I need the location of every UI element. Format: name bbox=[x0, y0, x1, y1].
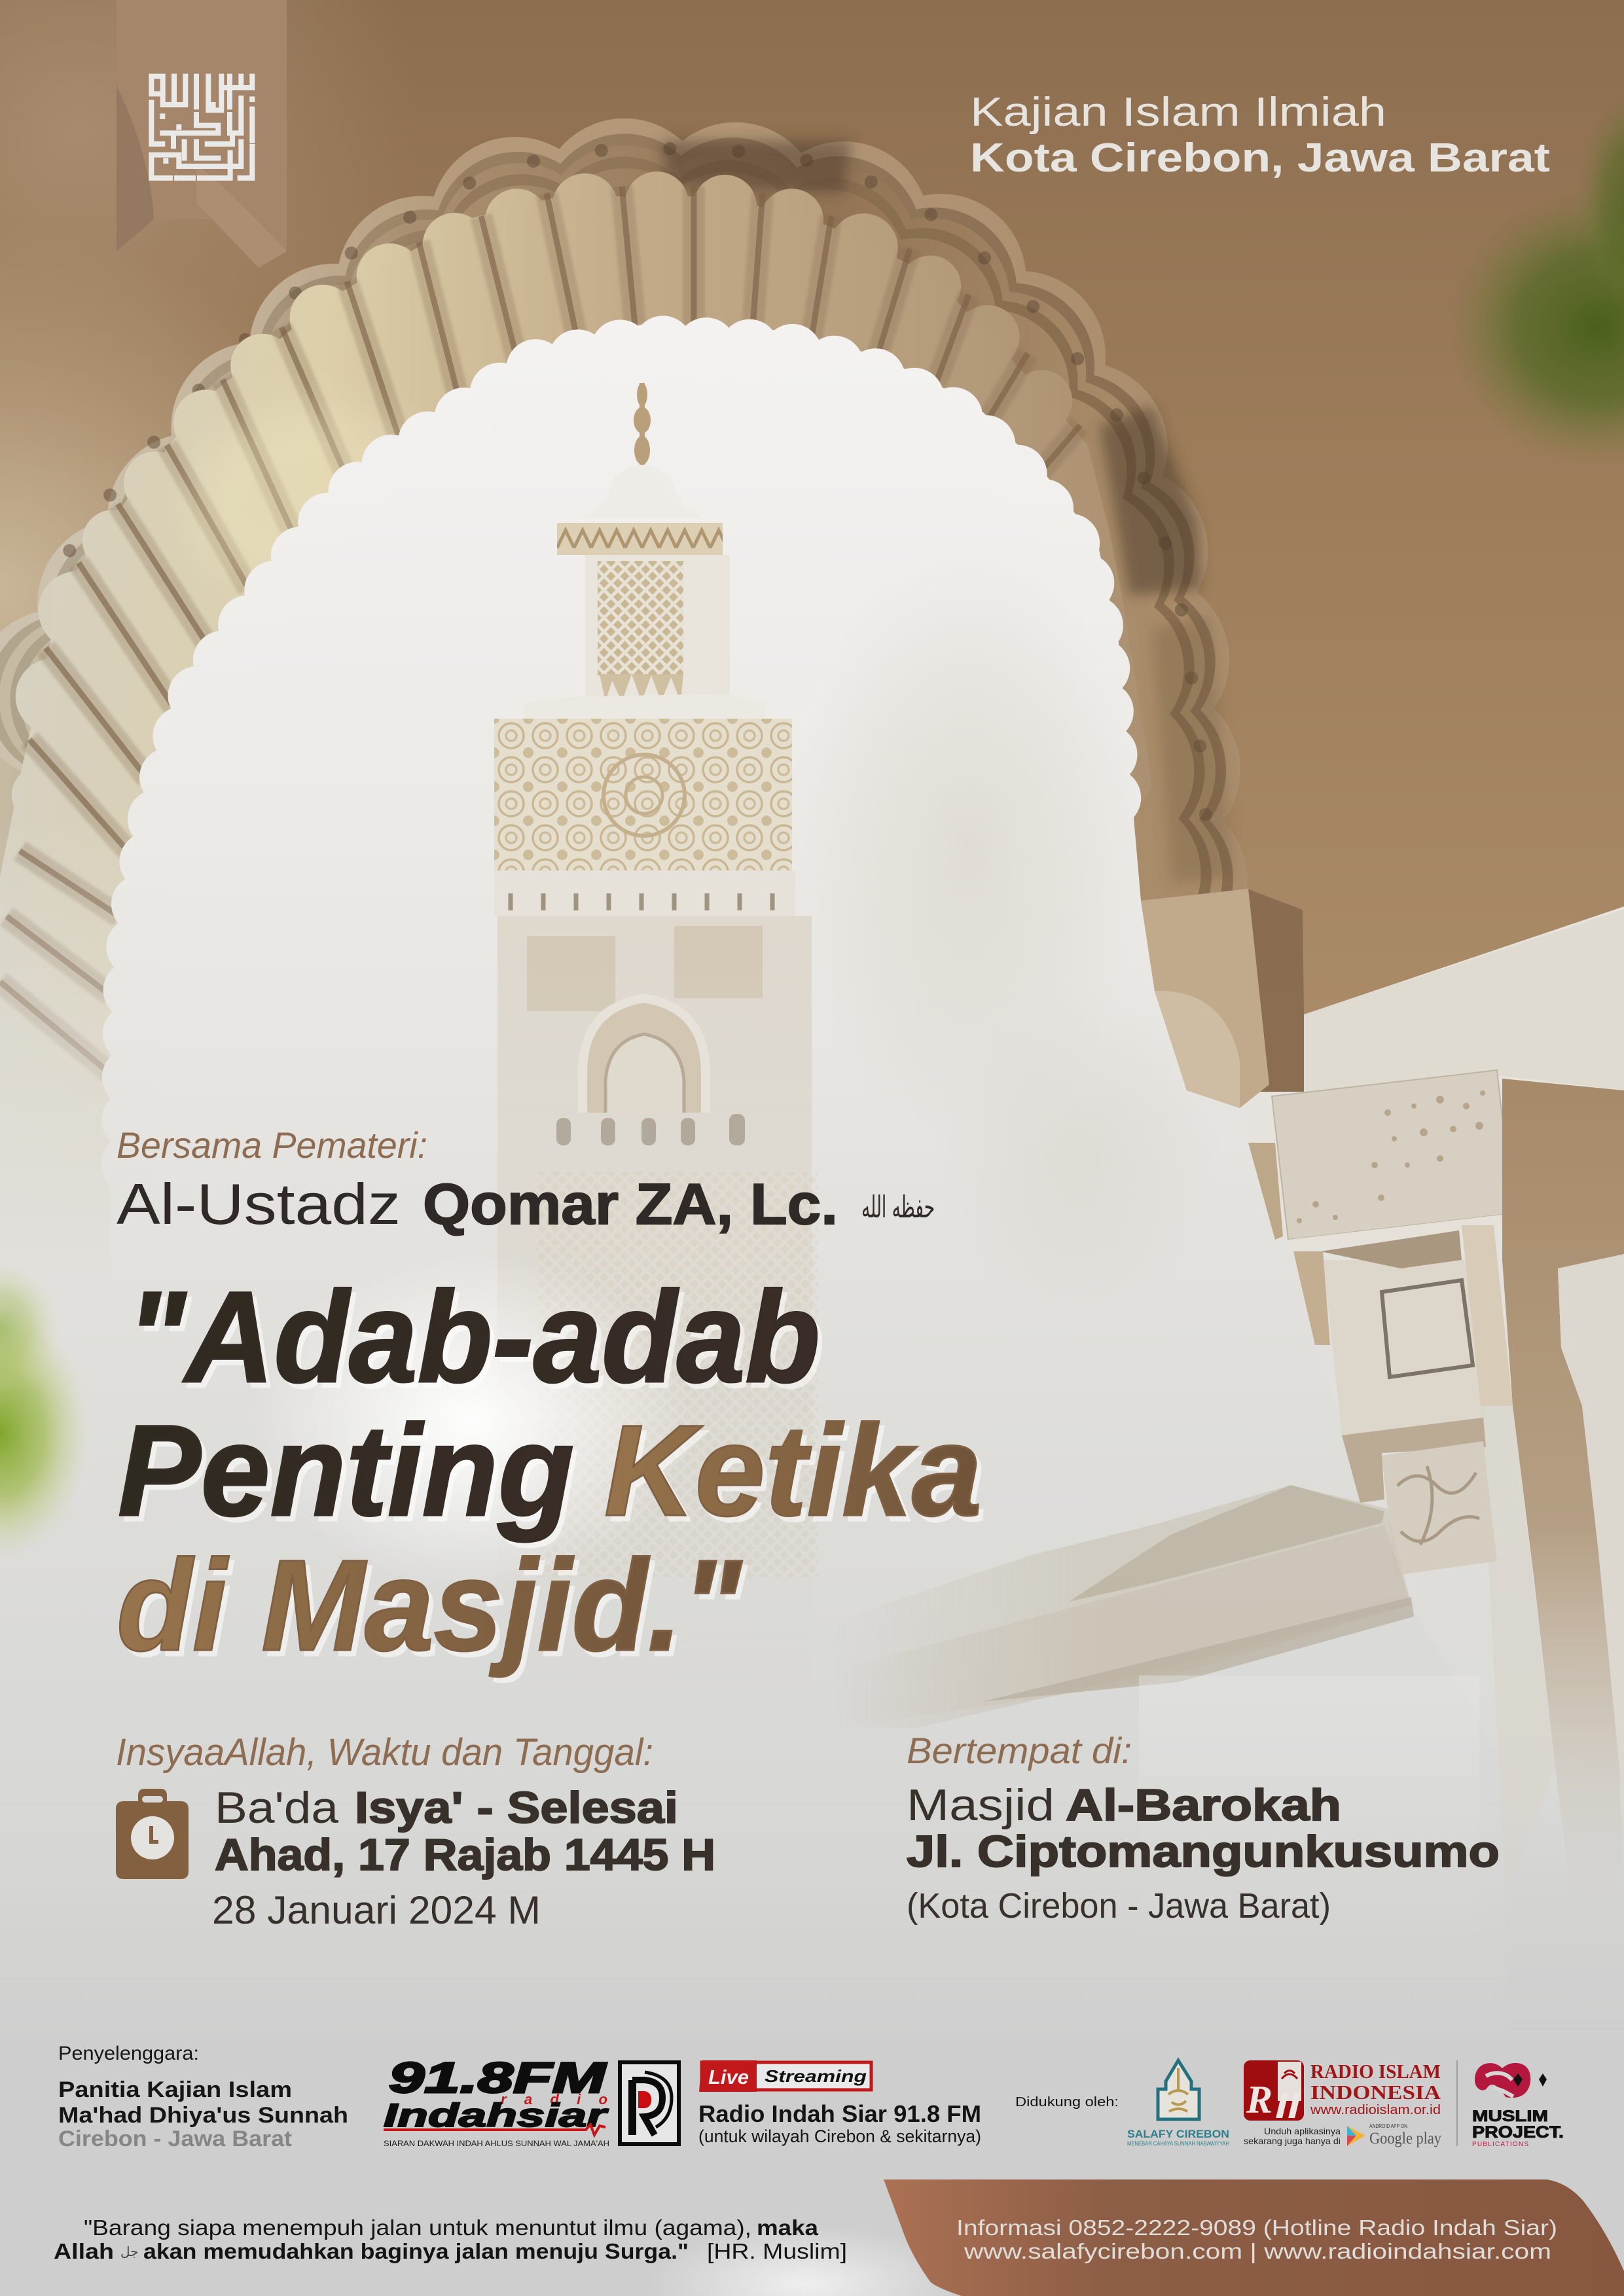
organizer block bbox=[58, 2043, 348, 2151]
heading: event location: Kota Cirebon, Jawa Barat bbox=[970, 135, 1550, 181]
hadith quote: maka bbox=[757, 2215, 819, 2240]
organizer block: Ma'had Dhiya'us Sunnah bbox=[58, 2103, 348, 2128]
arch opening: bright sky bbox=[0, 325, 1506, 2296]
live streaming text: (untuk wilayah Cirebon & sekitarnya) bbox=[698, 2126, 981, 2146]
logo: Radio Islam Indonesia: INDONESIA bbox=[1310, 2081, 1441, 2104]
main title: Ketika bbox=[604, 1398, 982, 1543]
minaret finial bbox=[634, 383, 651, 465]
logo: Muslim Project: MUSLIM bbox=[1472, 2108, 1548, 2125]
logo: Radio Islam Indonesia: www.radioislam.or.id bbox=[1310, 2103, 1441, 2117]
hadith quote: جل bbox=[120, 2244, 139, 2259]
logo: Salafy Cirebon bbox=[1127, 2060, 1229, 2147]
logo: Radio Islam Indonesia: Google play bbox=[1369, 2130, 1441, 2147]
venue details: Jl. Ciptomangunkusumo bbox=[907, 1827, 1500, 1876]
background: brown wall bbox=[0, 0, 1624, 1092]
logo: 91.8FM radio Indah Siar: radio bbox=[501, 2091, 607, 2108]
logo: 91.8FM radio Indah Siar: 91.8FM bbox=[389, 2053, 607, 2102]
hadith quote: "Barang siapa menempuh jalan untuk menuntut ilmu (agama), bbox=[84, 2215, 751, 2240]
heading: event location: Kajian Islam Ilmiah bbox=[970, 90, 1386, 135]
white glow behind title bbox=[249, 1250, 694, 1590]
venue details: Al-Barokah bbox=[1066, 1780, 1341, 1830]
right building: wall and stone blocks bbox=[1141, 889, 1624, 1898]
main title: Penting bbox=[118, 1398, 574, 1543]
fade into footer bbox=[0, 1734, 1624, 2296]
logo: Salafy Cirebon: SALAFY CIREBON bbox=[1127, 2128, 1229, 2140]
organizer block: Penyelenggara: bbox=[58, 2043, 199, 2064]
logo: Radio Islam Indonesia bbox=[1244, 2060, 1441, 2147]
minaret tower bbox=[494, 383, 818, 1734]
main title bbox=[117, 1265, 982, 1677]
speaker name bbox=[117, 1172, 935, 1236]
venue details: Masjid bbox=[907, 1780, 1055, 1830]
icon: square kufic bismillah logo bbox=[151, 77, 252, 178]
venue label: Bertempat di: bbox=[907, 1730, 1132, 1771]
logo: Radio Islam Indonesia: ANDROID APP ON bbox=[1369, 2123, 1407, 2129]
logo: 91.8FM radio Indah Siar: SIARAN DAKWAH INDAH AHLUS SUNNAH WAL JAMA'AH bbox=[384, 2139, 609, 2148]
hadith quote: [HR. Muslim] bbox=[707, 2239, 847, 2263]
logo: 91.8FM radio Indah Siar bbox=[384, 2053, 609, 2148]
blurred leaf: left bbox=[0, 1263, 88, 1558]
time and date: 28 Januari 2024 M bbox=[212, 1888, 541, 1932]
speaker label: Bersama Pemateri: bbox=[117, 1124, 427, 1166]
panel: contact information: Informasi 0852-2222-9089 (Hotline Radio Indah Siar) bbox=[956, 2215, 1557, 2240]
time and date bbox=[212, 1783, 715, 1932]
live streaming text bbox=[698, 2100, 981, 2146]
hadith quote: Allah bbox=[54, 2239, 114, 2263]
arch: ornamented stone band bbox=[0, 141, 1234, 1374]
venue details: (Kota Cirebon - Jawa Barat) bbox=[907, 1886, 1331, 1926]
blurred leaf: top right bbox=[1450, 92, 1624, 465]
main title: "Adab-adab bbox=[127, 1265, 820, 1409]
logo: Radio Islam Indonesia: RADIO ISLAM bbox=[1310, 2060, 1441, 2083]
organizer block: Cirebon - Jawa Barat bbox=[58, 2126, 292, 2151]
hadith quote: akan memudahkan baginya jalan menuju Surga." bbox=[143, 2239, 689, 2263]
arch: voussoir stones bbox=[0, 171, 1152, 1374]
logo: Muslim Project: PROJECT. bbox=[1472, 2123, 1564, 2142]
speaker name: Al-Ustadz bbox=[117, 1172, 401, 1236]
logo: Muslim Project bbox=[1457, 2060, 1564, 2148]
heading: event location bbox=[970, 90, 1550, 181]
time and date: Isya' - Selesai bbox=[355, 1783, 678, 1833]
main title: di Masjid." bbox=[117, 1533, 742, 1677]
live streaming badge bbox=[699, 2060, 871, 2092]
time and date: Ba'da bbox=[215, 1783, 338, 1833]
venue details bbox=[907, 1780, 1500, 1926]
logo: Radio Islam Indonesia: Unduh aplikasinya bbox=[1264, 2126, 1341, 2136]
live streaming badge: Streaming bbox=[765, 2066, 867, 2086]
logo: Radio Islam Indonesia: R bbox=[1246, 2078, 1272, 2121]
ribbon tag bbox=[117, 0, 287, 268]
left fade of the arch bbox=[0, 818, 216, 1374]
speaker name: Qomar ZA, Lc. bbox=[423, 1172, 838, 1236]
hadith quote bbox=[54, 2215, 847, 2263]
logo: R emblem bbox=[620, 2062, 679, 2144]
time and date: Ahad, 17 Rajab 1445 H bbox=[215, 1830, 715, 1880]
logo: Muslim Project: PUBLICATIONS bbox=[1472, 2141, 1528, 2148]
supporters label: Didukung oleh: bbox=[1015, 2095, 1119, 2109]
logo: Radio Islam Indonesia: sekarang juga hanya di bbox=[1244, 2136, 1341, 2146]
logo: Radio Islam Indonesia: II bbox=[1275, 2085, 1301, 2126]
right building: sloping roof bbox=[831, 1485, 1414, 1728]
live streaming badge: Live bbox=[708, 2066, 749, 2089]
white building wall under the roof bbox=[1139, 1676, 1479, 1977]
logo: 91.8FM radio Indah Siar: Indahsiar bbox=[384, 2097, 609, 2134]
live streaming text: Radio Indah Siar 91.8 FM bbox=[698, 2100, 981, 2127]
time label: InsyaaAllah, Waktu dan Tanggal: bbox=[116, 1731, 653, 1774]
arch: dark shaded ornaments bbox=[661, 141, 1234, 884]
speaker name: حفظه الله bbox=[861, 1189, 935, 1225]
panel: contact information bbox=[884, 2179, 1624, 2296]
logo: Salafy Cirebon: MENEBAR CAHAYA SUNNAH NABAWIYYAH bbox=[1127, 2140, 1229, 2147]
panel: contact information: www.salafycirebon.com | www.radioindahsiar.com bbox=[964, 2239, 1551, 2263]
icon: clock bbox=[116, 1789, 189, 1879]
organizer block: Panitia Kajian Islam bbox=[58, 2077, 292, 2102]
